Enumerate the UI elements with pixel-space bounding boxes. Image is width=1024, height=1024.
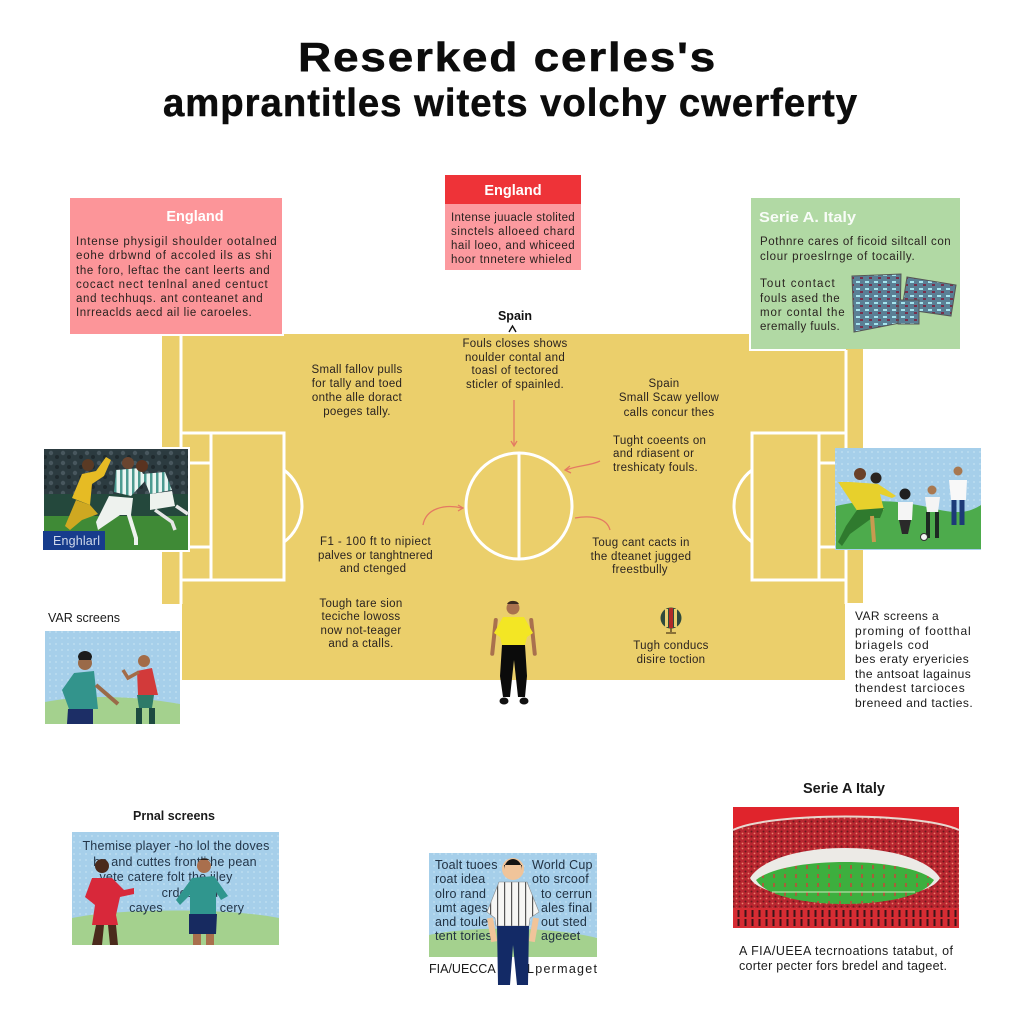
title: amprantitles witets volchy cwerferty (163, 82, 858, 125)
label: VAR screens left: VAR screens (48, 611, 120, 625)
pitch annotation: F1: and ctenged (340, 563, 406, 575)
pitch annotation: fouls (top center): noulder contal and (465, 352, 565, 364)
pitch annotation: small fallow: poeges tally. (323, 406, 391, 418)
text block: left column (435, 858, 498, 943)
pitch annotation: small fallow: Small fallov pulls (311, 364, 403, 376)
pitch annotation: small fallow: for tally and toed (312, 378, 402, 390)
pitch annotation: tught coeents: and rdiasent or (613, 448, 694, 460)
panel: England left: and techhuqs. ant conteanet and (76, 293, 263, 305)
player: goalkeeper (65, 457, 111, 530)
player: yellow kit (838, 468, 896, 546)
text block: left column: and toule (435, 915, 488, 929)
pitch annotation: toug cant (591, 537, 691, 576)
football pitch (162, 334, 863, 680)
text block: right column: to cerrun (541, 887, 592, 901)
text block: left column: umt ages (435, 901, 488, 915)
pitch annotation: F1: palves or tanghtnered (318, 550, 433, 562)
panel: Prnal screens scene: Themise player -ho lol the doves (82, 839, 270, 853)
text block: VAR screens: thendest tarcioces (855, 681, 965, 695)
panel: Prnal screens scene: crdes and (162, 886, 218, 900)
text block: right column: ales final (541, 901, 592, 915)
pitch annotation: fouls (top center): sticler of spainled. (466, 379, 564, 391)
text block: left column: Toalt tuoes (435, 858, 498, 872)
panel: England left: the foro, leftac the cant leerts and (76, 265, 270, 277)
arrows (423, 400, 610, 530)
photo: England match (43, 448, 189, 551)
panel: Prnal screens scene (72, 832, 279, 945)
player: red kit (85, 859, 134, 945)
pitch annotation: tough tare: and a ctalls. (328, 638, 394, 650)
panel: England left (70, 198, 283, 335)
pitch annotation: toug cant: the dteanet jugged (591, 551, 691, 563)
text block: stadium caption: A FIA/UEEA tecrnoations tatabut, of (739, 944, 954, 958)
panel: Prnal screens scene: cery (220, 901, 245, 915)
text block: left column: roat idea (435, 872, 485, 886)
text block: VAR screens: the antsoat lagainus (855, 667, 971, 681)
player: child (898, 488, 913, 534)
pitch annotation: fouls (top center) (462, 309, 568, 391)
panel: England top: sinctels alloeed chard (451, 226, 575, 238)
panel: Serie A Italy: Pothnre cares of ficoid siltcall con (760, 236, 951, 248)
pitch annotation: tugh contucs: Tugh conducs (633, 640, 709, 652)
pitch annotation: Spain right: Spain (649, 378, 679, 390)
balls (920, 534, 928, 540)
pitch annotation: fouls (top center): Fouls closes shows (462, 338, 568, 350)
icon: referee striped shirt (487, 858, 539, 985)
text block: VAR screens: VAR screens a (855, 609, 939, 623)
pitch annotation: Spain right: Small Scaw yellow (619, 392, 720, 404)
text block: VAR screens: breneed and tacties. (855, 696, 973, 710)
pitch annotation: tough tare: now not-teager (321, 625, 401, 637)
text block: right column: ageeet (541, 929, 581, 943)
panel: Serie A Italy (750, 198, 960, 350)
label: Serie A Italy: Serie A Italy (803, 781, 885, 797)
panel: Serie A Italy: eremally fuuls. (760, 321, 840, 333)
official (949, 466, 967, 525)
pitch annotation: tught coeents: Tught coeents on (613, 435, 706, 447)
caption: FIA/UECCA (429, 962, 496, 976)
text block: left column: tent tories (435, 929, 492, 943)
pitch annotation: tough tare: teciche lowoss (322, 611, 400, 623)
text block: stadium caption (739, 944, 954, 973)
player: striped right (136, 460, 188, 530)
text block: stadium caption: corter pecter fors bredel and tageet. (739, 959, 947, 973)
pitch annotation: small fallow: onthe alle doract (312, 392, 403, 404)
text block: right column (532, 858, 593, 943)
pitch annotation: fouls (top center): Spain (498, 309, 532, 323)
player: white and black (925, 486, 940, 538)
panel: England left: cocact nect tenlnal aned centuct (76, 279, 268, 291)
player: teal kit (176, 858, 228, 945)
panel: England top: Intense juuacle stolited (451, 212, 575, 224)
text block: VAR screens: proming of footthal (855, 624, 971, 638)
title: Reserked cerles's (298, 34, 717, 80)
panel: England left: England (166, 209, 224, 225)
panel: England left: eohe drbwnd of accoled ils as shi (76, 250, 272, 262)
panel: Prnal screens scene: cayes (129, 901, 163, 915)
pitch annotation: F1: F1 - 100 ft to nipiect (320, 536, 432, 548)
pitch annotation: tough tare (319, 598, 403, 650)
pitch annotation: tough tare: Tough tare sion (319, 598, 403, 610)
pitch annotation: F1 (318, 536, 433, 575)
panel: Serie A Italy: clour proeslrnge of tocailly. (760, 251, 915, 263)
player: striped left (96, 457, 146, 545)
panel: Prnal screens scene: vete catere folt the jiley (99, 870, 233, 884)
pitch annotation: fouls (top center): toasl of tectored (472, 365, 558, 377)
text block: VAR screens (855, 609, 973, 710)
panel: Serie A Italy: Serie A. Italy (759, 210, 856, 226)
caption (429, 962, 598, 976)
image: stadium prints (852, 274, 956, 332)
pitch annotation: toug cant: freestbully (612, 564, 668, 576)
panel: England top: hail loeo, and whiceed (451, 240, 575, 252)
pitch annotation: tught coeents (613, 435, 706, 474)
text block: VAR screens: bes eraty eryericies (855, 652, 969, 666)
text block: left column: olro rand (435, 887, 486, 901)
caption: Lpermaget (527, 962, 598, 976)
pitch annotation: small fallow (311, 364, 403, 418)
player: teal kit (62, 651, 118, 724)
pitch annotation: tugh contucs (633, 640, 709, 666)
photo: players on grass (835, 448, 981, 550)
panel: Serie A Italy: mor contal the (760, 307, 845, 319)
title (163, 34, 858, 125)
panel: Prnal screens scene: bn and cuttes frontli he pean (93, 855, 257, 869)
icon: referee yellow shirt (490, 601, 537, 704)
text block: VAR screens: briagels cod (855, 638, 929, 652)
player: red kit (123, 655, 158, 724)
panel: England top: England (484, 183, 542, 199)
pitch annotation: tugh contucs: disire toction (637, 654, 705, 666)
label: England tag: Enghlarl (53, 534, 100, 548)
panel: Serie A Italy: fouls ased the (760, 293, 840, 305)
photo: VAR discussion (45, 631, 180, 724)
text block: right column: World Cup (532, 858, 593, 872)
text block: right column: oto srcoof (532, 872, 589, 886)
panel: Serie A Italy: Tout contact (760, 278, 836, 290)
pitch annotation: toug cant: Toug cant cacts in (592, 537, 690, 549)
panel: England left: Intense physigil shoulder ootalned (76, 236, 277, 248)
photo: stadium (733, 807, 959, 928)
panel: referee World Cup (429, 853, 598, 985)
icon: badge on stand (660, 608, 682, 633)
pitch annotation: Spain right: calls concur thes (624, 407, 714, 419)
panel: England top (445, 175, 581, 270)
panel: England top: hoor tnnetere whieled (451, 254, 572, 266)
pitch annotation: Spain right (619, 378, 720, 419)
label: Prnal screens: Prnal screens (133, 809, 215, 823)
text block: right column: out sted (541, 915, 587, 929)
label: England tag (43, 531, 105, 550)
pitch annotation: tught coeents: treshicaty fouls. (613, 462, 698, 474)
panel: England left: Inrreaclds aecd ail lie caroeles. (76, 307, 252, 319)
